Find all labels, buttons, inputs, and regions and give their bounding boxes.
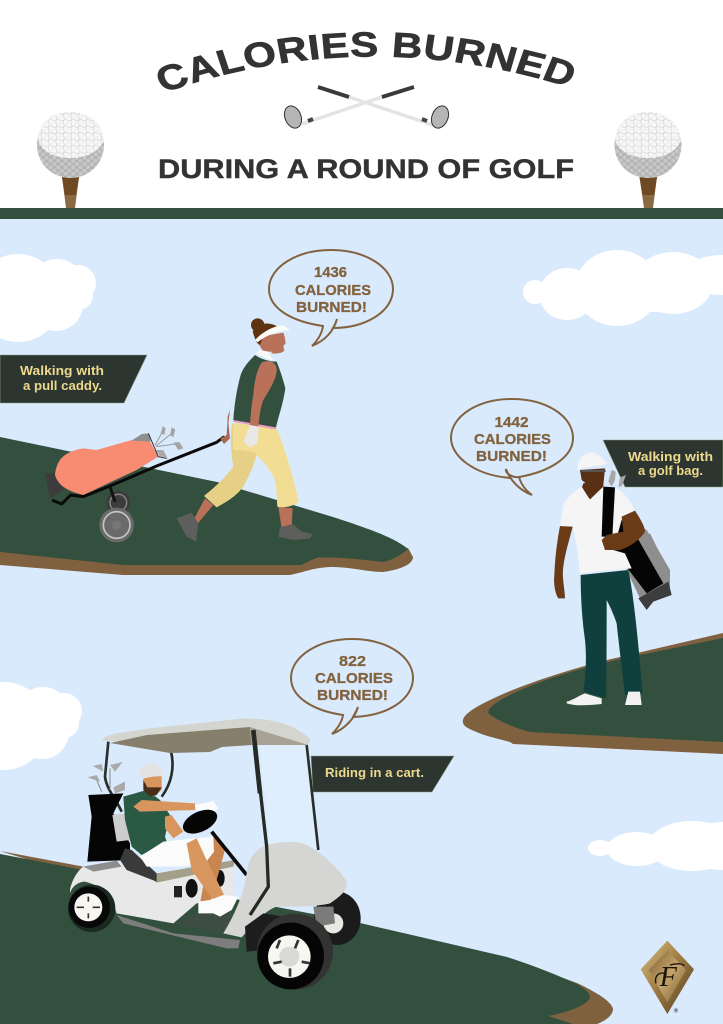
- sky background: [0, 219, 723, 1024]
- panel: label walking with a pull caddy: Walking with: [20, 364, 104, 378]
- panel: label walking with a pull caddy: a pull caddy.: [23, 379, 102, 393]
- callout: 1442 calories burned: BURNED!: [476, 449, 547, 465]
- illustration: woman golfer pulling caddy: [177, 318, 313, 542]
- icon: brand logo diamond: ®: [674, 1008, 679, 1015]
- illustration: pull caddy: [45, 426, 223, 542]
- callout: 1442 calories burned: [451, 399, 573, 495]
- callout: 822 calories burned: BURNED!: [317, 688, 388, 704]
- cloud: bottom right: [588, 821, 723, 871]
- cloud: middle left: [0, 682, 82, 770]
- illustration: man golfer with bag: [554, 453, 672, 705]
- icon: left golf ball on tee: [37, 112, 104, 208]
- ground band: [0, 208, 723, 219]
- hill: bottom: [0, 851, 613, 1024]
- callout: 822 calories burned: CALORIES: [315, 671, 393, 687]
- hill: right: [463, 633, 723, 754]
- illustration: golf cart with driver: [68, 718, 361, 990]
- panel: label riding in a cart: Riding in a cart.: [325, 766, 424, 780]
- callout: 822 calories burned: [291, 639, 413, 734]
- callout: 1442 calories burned: 1442: [494, 415, 528, 431]
- callout: 1442 calories burned: CALORIES: [474, 432, 551, 448]
- callout: 1436 calories burned: CALORIES: [295, 283, 371, 299]
- panel: label walking with a pull caddy: [0, 355, 147, 403]
- panel: label walking with a golf bag: Walking with: [628, 450, 713, 464]
- callout: 822 calories burned: 822: [339, 654, 366, 670]
- icon: crossed golf clubs: [281, 87, 452, 131]
- callout: 1436 calories burned: [269, 250, 393, 346]
- icon: right golf ball on tee: [614, 112, 682, 208]
- cloud: top right: [523, 250, 723, 326]
- icon: brand logo diamond: [641, 941, 694, 1015]
- subtitle: DURING A ROUND OF GOLF: [158, 154, 574, 184]
- icon: brand logo diamond: F: [659, 962, 678, 993]
- callout: 1436 calories burned: 1436: [314, 265, 347, 281]
- panel: label riding in a cart: [311, 756, 454, 792]
- panel: label walking with a golf bag: a golf bag.: [638, 464, 703, 478]
- panel: label walking with a golf bag: [603, 440, 723, 487]
- callout: 1436 calories burned: BURNED!: [296, 300, 367, 316]
- hill: upper left: [0, 437, 413, 575]
- title: calories burned: CALORIES BURNED: [158, 32, 574, 90]
- cloud: top left: [0, 254, 96, 342]
